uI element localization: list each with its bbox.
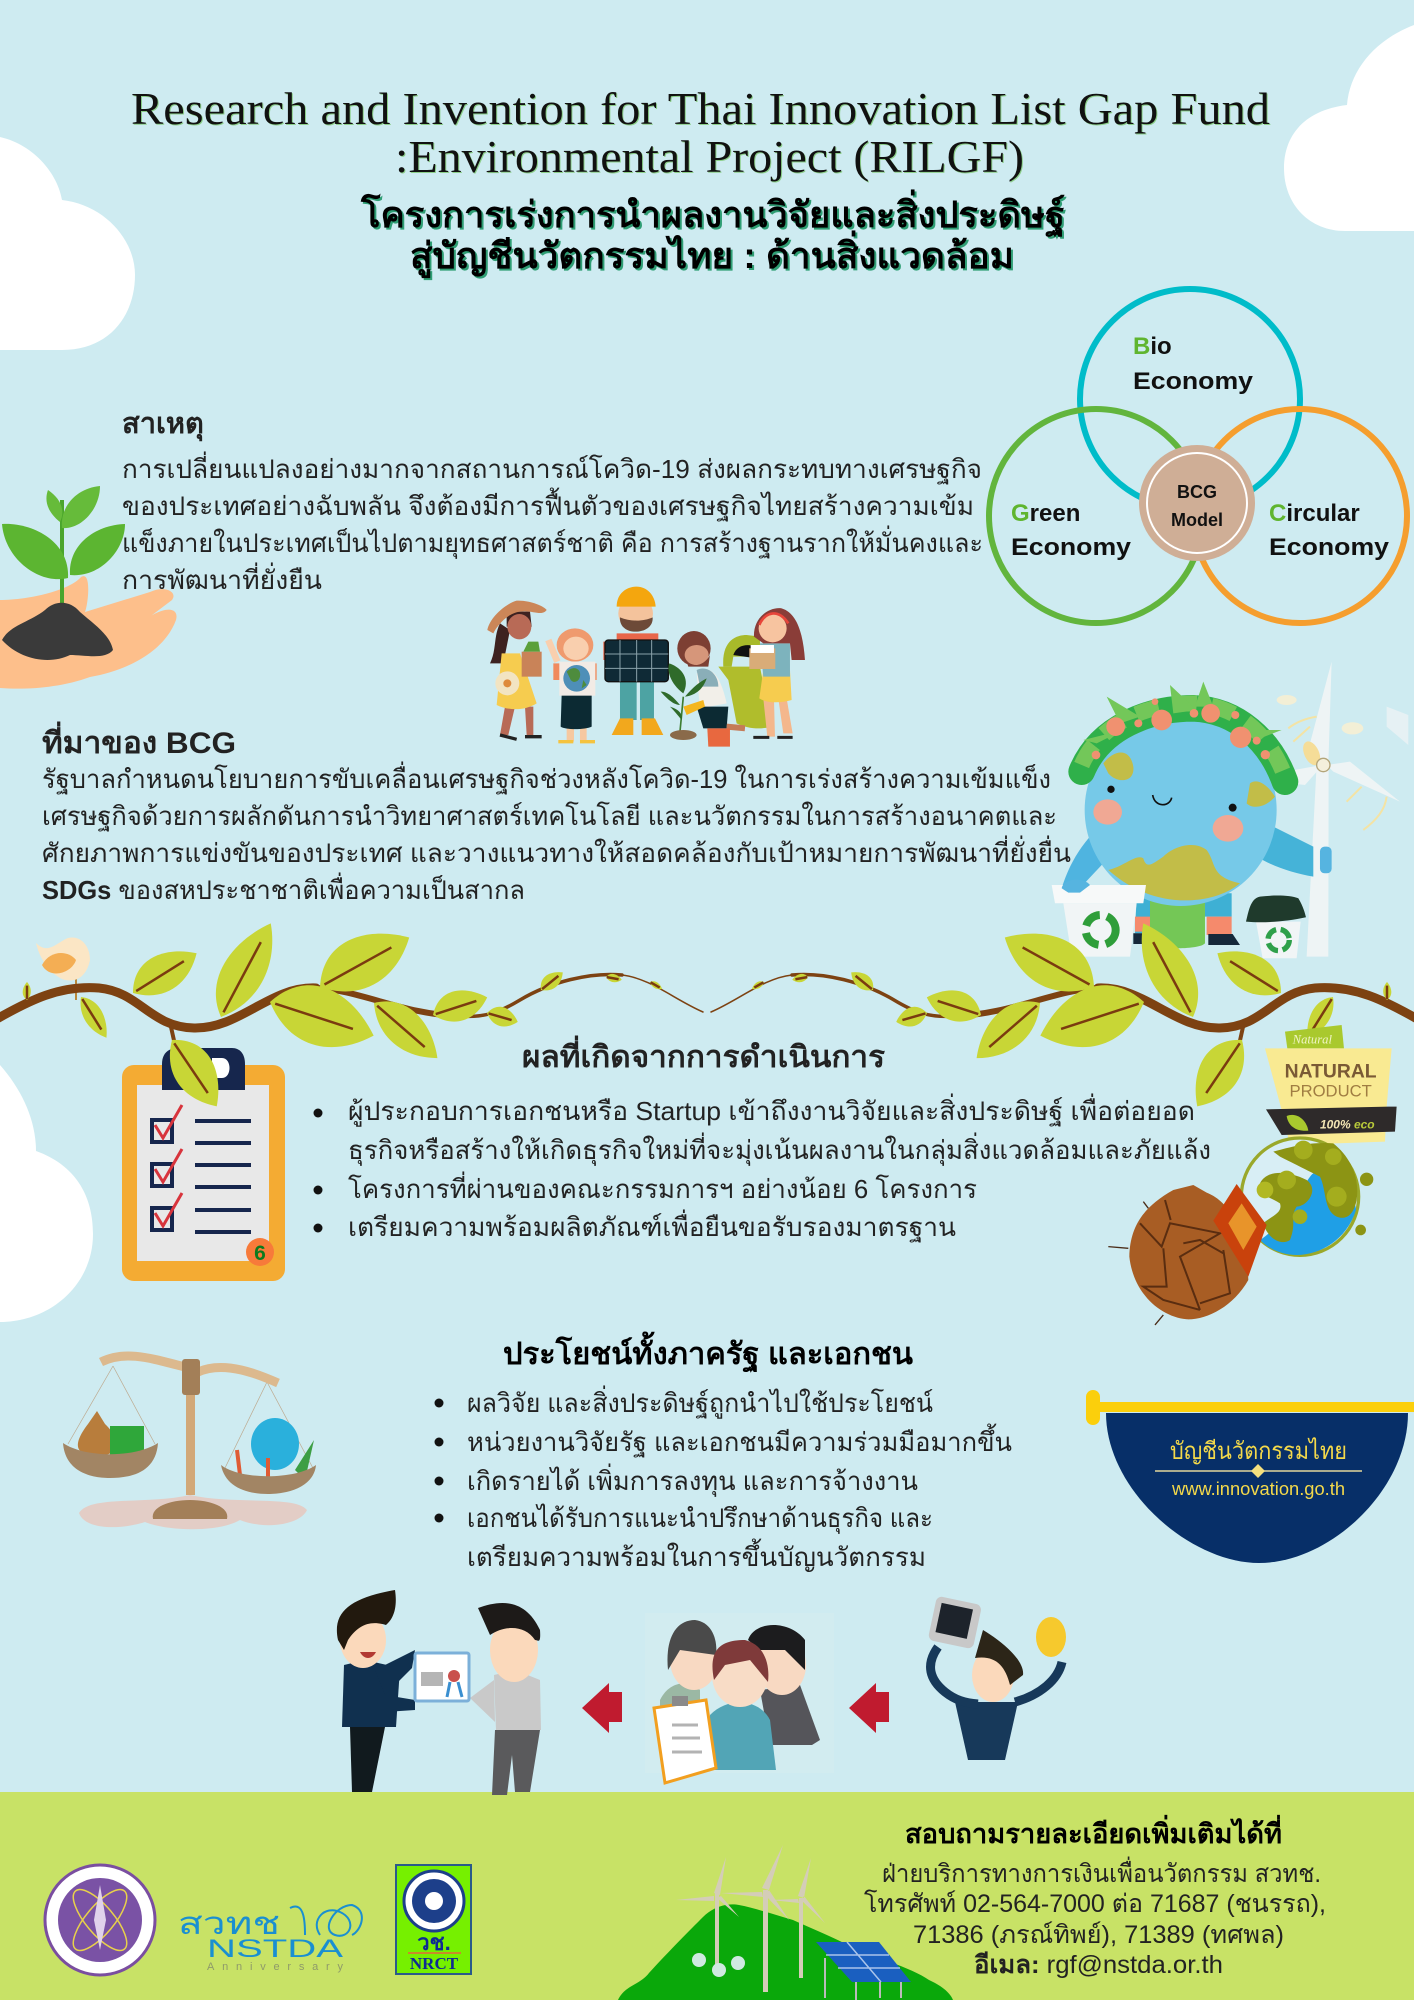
logo: NRCT xyxy=(396,1865,471,1974)
label: Bio Economy: Economy xyxy=(1133,368,1254,395)
bowl url: www.innovation.go.th xyxy=(1171,1479,1345,1499)
label: BCG Model: BCG xyxy=(1177,482,1217,502)
Thai title line 1: โครงการเร่งการนำผลงานวิจัยและสิ่งประดิษฐ์ xyxy=(360,189,1065,238)
green earth xyxy=(1241,1138,1373,1255)
illustration: man with tablet and bulb xyxy=(928,1596,1066,1760)
globe land xyxy=(1103,752,1275,900)
title: English line 1: Research and Invention for Thai Innovation List Gap Fund xyxy=(131,83,1270,134)
Thai title line 2: สู่บัญชีนวัตกรรมไทย : ด้านสิ่งแวดล้อม xyxy=(410,230,1014,279)
label: Green Economy: Green xyxy=(1011,500,1080,527)
icon: clipboard: 6 xyxy=(254,1242,266,1265)
icon: balance scale xyxy=(63,1356,316,1529)
list: benefits: เกิดรายได้ เพิ่มการลงทุน และการจ้างงาน xyxy=(467,1463,918,1497)
label: Circular Economy: Circular xyxy=(1269,500,1360,527)
scale base shadow xyxy=(79,1495,307,1529)
text block: causes: การพัฒนาที่ยั่งยืน xyxy=(122,562,322,595)
coffee cup xyxy=(1246,896,1306,958)
list: benefits xyxy=(434,1385,1012,1572)
man right xyxy=(470,1603,541,1795)
bowl xyxy=(1106,1413,1408,1563)
icon: plant in hand xyxy=(0,486,177,689)
man left xyxy=(337,1590,415,1792)
illustration: two men exchanging certificate xyxy=(337,1590,541,1795)
natural product badge: NATURAL xyxy=(1285,1061,1377,1082)
icon: clipboard xyxy=(122,1048,285,1281)
centre circle xyxy=(1139,445,1255,561)
list: results xyxy=(314,1093,1211,1243)
right bowl with globe xyxy=(221,1418,316,1494)
illustration: hill with wind turbines and solar panel xyxy=(618,1845,953,2000)
heading: causes: สาเหตุ xyxy=(122,408,204,441)
circle: circular xyxy=(1193,409,1407,623)
left bowl with money xyxy=(63,1411,158,1478)
wind turbine xyxy=(1248,662,1408,957)
label: Circular Economy xyxy=(1269,500,1390,561)
heading: origin of BCG: ที่มาของ BCG xyxy=(42,721,236,760)
globe body xyxy=(1085,714,1277,906)
list: benefits: ผลวิจัย และสิ่งประดิษฐ์ถูกนำไปใช้ประโยชน์ xyxy=(467,1385,933,1419)
decorative branch: left xyxy=(0,913,703,1117)
woman with hat xyxy=(487,601,547,739)
scale strings xyxy=(68,1366,314,1470)
label: Green Economy xyxy=(1011,500,1132,561)
text block: causes: การเปลี่ยนแปลงอย่างมากจากสถานการณ์โควิด-19 ส่งผลกระทบทางเศรษฐกิจ xyxy=(122,451,982,485)
text block: BCG origin xyxy=(42,761,1071,905)
text block: causes xyxy=(122,451,983,595)
title: English line 2: :Environmental Project (RILGF) xyxy=(395,131,1024,182)
mascot limbs xyxy=(1062,827,1332,948)
circle: bio xyxy=(1080,289,1300,509)
flower wreath xyxy=(1082,682,1285,782)
contact line 1: ฝ่ายบริการทางการเงินเพื่อนวัตกรรม สวทช. xyxy=(882,1856,1321,1888)
list: results: โครงการที่ผ่านของคณะกรรมการฯ อย่างน้อย 6 โครงการ xyxy=(348,1171,977,1204)
contact line 3: 71386 (ภรณ์ทิพย์), 71389 (ทศพล) xyxy=(913,1921,1284,1949)
illustration: people xyxy=(487,587,805,747)
arrow: left pointing xyxy=(582,1683,622,1733)
Thai title xyxy=(360,189,1065,279)
logo: NRCT: NRCT xyxy=(410,1954,459,1973)
text block: BCG origin: รัฐบาลกำหนดนโยบายการขับเคลื่อนเศรษฐกิจช่วงหลังโควิด-19 ในการเร่งสร้างความเข้มแข็ง xyxy=(42,761,1051,795)
logo: NSTDA: Anniversary xyxy=(207,1961,344,1973)
certificate xyxy=(415,1653,469,1701)
boy with plant and green bin xyxy=(661,631,772,747)
label: Green Economy: Economy xyxy=(1011,534,1132,561)
list: benefits: หน่วยงานวิจัยรัฐ และเอกชนมีความร่วมมือมากขึ้น xyxy=(467,1423,1012,1458)
woman with box xyxy=(749,608,805,737)
footer band xyxy=(0,1792,1414,2000)
label: Bio Economy: Bio xyxy=(1133,333,1172,360)
list: benefits: เตรียมความพร้อมในการขึ้นบัญนวัตกรรม xyxy=(467,1538,926,1572)
contact block xyxy=(864,1814,1326,1979)
text block: BCG origin: SDGs ของสหประชาชาติเพื่อความเป็นสากล xyxy=(42,872,525,905)
mascot face xyxy=(1093,786,1243,842)
BCG venn diagram xyxy=(989,289,1407,623)
bowl title: บัญชีนวัตกรรมไทย xyxy=(1170,1437,1347,1465)
text block: BCG origin: เศรษฐกิจด้วยการผลักดันการนำวิทยาศาสตร์เทคโนโลยี และนวัตกรรมในการสร้างอนาคตและ xyxy=(42,801,1057,832)
contact heading: สอบถามรายละเอียดเพิ่มเติมได้ที่ xyxy=(905,1814,1282,1849)
icon: bird xyxy=(36,937,90,1000)
natural product badge: Natural xyxy=(1292,1032,1333,1046)
recycling bin xyxy=(1052,880,1146,957)
heading: results: ผลที่เกิดจากการดำเนินการ xyxy=(522,1035,885,1074)
panel: innovation list bowl xyxy=(1086,1390,1414,1563)
cloud: top left xyxy=(0,137,135,350)
label: Circular Economy: Economy xyxy=(1269,534,1390,561)
logo: TISTR emblem xyxy=(45,1865,155,1975)
list: results: เตรียมความพร้อมผลิตภัณฑ์เพื่อยืนขอรับรองมาตรฐาน xyxy=(348,1209,956,1243)
contact line 4: อีเมล: rgf@nstda.or.th xyxy=(974,1951,1223,1979)
logo: NSTDA xyxy=(178,1905,362,1973)
circle: green xyxy=(989,409,1203,623)
cracked dry earth xyxy=(1108,1184,1267,1325)
bowl handle xyxy=(1086,1390,1414,1425)
arrow: left pointing second xyxy=(849,1683,889,1733)
child with globe poster xyxy=(548,628,597,742)
logo: NRCT: วช. xyxy=(417,1930,451,1955)
list: results: ผู้ประกอบการเอกชนหรือ Startup เข้าถึงงานวิจัยและสิ่งประดิษฐ์ เพื่อต่อยอด xyxy=(348,1093,1195,1127)
natural product badge: 100% eco xyxy=(1320,1117,1375,1131)
natural product badge: PRODUCT xyxy=(1289,1082,1372,1101)
illustration: earth mascot xyxy=(1052,662,1408,958)
list: results: ธุรกิจหรือสร้างให้เกิดธุรกิจใหม่ที่จะมุ่งเน้นผลงานในกลุ่มสิ่งแวดล้อมและภัยแล้ง xyxy=(348,1132,1211,1166)
heading: benefits: ประโยชน์ทั้งภาครัฐ และเอกชน xyxy=(503,1331,913,1374)
text block: BCG origin: ศักยภาพการแข่งขันของประเทศ และวางแนวทางให้สอดคล้องกับเป้าหมายการพัฒนาที่ยั่งยื่น xyxy=(42,835,1071,868)
scale beam xyxy=(101,1356,278,1383)
label: Bio Economy xyxy=(1133,333,1254,395)
contact line 2: โทรศัพท์ 02-564-7000 ต่อ 71687 (ชนรรถ), xyxy=(864,1889,1326,1918)
label: BCG Model: Model xyxy=(1171,510,1223,530)
natural product badge xyxy=(1265,1025,1397,1145)
man with solar panel xyxy=(603,587,668,735)
scale pole xyxy=(153,1359,227,1519)
illustration: natural product label and earths xyxy=(1108,1025,1397,1325)
text block: causes: แข็งภายในประเทศเป็นไปตามยุทธศาสตร์ชาติ คือ การสร้างฐานรากให้มั่นคงและ xyxy=(122,525,983,559)
decorative branch: right xyxy=(711,913,1414,1117)
illustration: team with checklist xyxy=(645,1613,834,1783)
cloud: top right xyxy=(1284,25,1414,231)
logo: NSTDA: สวทช xyxy=(178,1906,280,1941)
cloud: middle left xyxy=(0,1065,93,1322)
title xyxy=(131,83,1270,182)
list: benefits: เอกชนได้รับการแนะนำปรึกษาด้านธุรกิจ และ xyxy=(467,1503,933,1534)
text block: causes: ของประเทศอย่างฉับพลัน จึงต้องมีการฟื้นตัวของเศรษฐกิจไทยสร้างความเข้ม xyxy=(122,487,974,522)
label: BCG Model xyxy=(1171,482,1223,530)
logo: NSTDA: NSTDA xyxy=(207,1935,344,1963)
